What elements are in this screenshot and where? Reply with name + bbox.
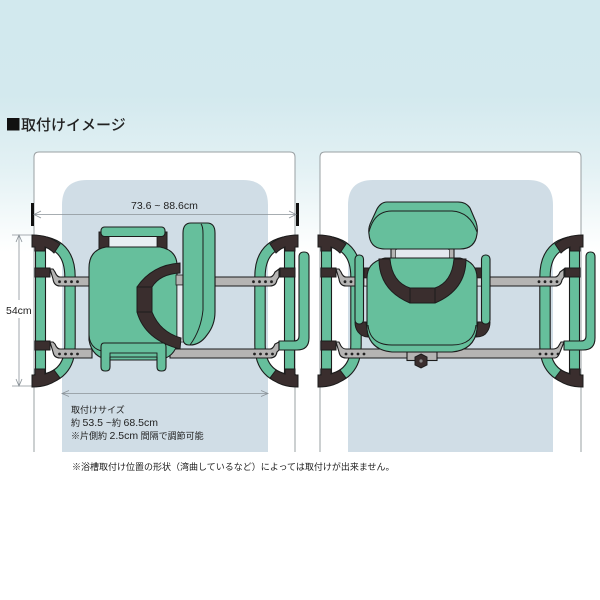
left clamp — [32, 235, 70, 387]
right armrest on rail — [564, 252, 595, 350]
left rails — [35, 268, 92, 358]
right clamp — [545, 235, 583, 387]
right clamp — [260, 235, 298, 387]
arm shadows — [364, 268, 482, 286]
seat body — [89, 247, 177, 360]
panel: right bathtub top view — [318, 152, 595, 452]
mounting size text: 約 53.5 ~約 68.5cm — [71, 417, 158, 429]
width dimension 73.6-88.6cm — [31, 200, 299, 226]
height dimension 54cm: 54cm — [6, 305, 32, 317]
left armrest — [355, 255, 368, 337]
seat front view — [355, 202, 490, 368]
right armrest on rail — [279, 252, 309, 350]
footnote: ※浴槽取付け位置の形状（湾曲しているなど）によっては取付けが出来ません。 — [72, 461, 395, 472]
panel: left bathtub top view — [6, 152, 309, 452]
seat body — [367, 258, 477, 352]
tub interior — [62, 180, 268, 452]
backrest — [183, 223, 215, 345]
rail behind backrest — [176, 275, 184, 342]
mounting size text — [71, 404, 204, 442]
seat side view — [89, 223, 215, 371]
mounting size text: 取付けサイズ — [71, 404, 125, 415]
mounting size dimension — [62, 390, 268, 396]
center bracket and nut — [407, 352, 437, 368]
rails — [321, 268, 580, 358]
back posts — [391, 248, 454, 260]
C-shaped armrest — [137, 263, 181, 349]
mounting size text: ※片側約 2.5cm 間隔で調節可能 — [71, 430, 204, 442]
tub interior — [348, 180, 553, 452]
backrest — [369, 202, 477, 249]
top handle — [99, 227, 167, 250]
left clamp — [318, 235, 356, 387]
width dimension 73.6-88.6cm: 73.6 ~ 88.6cm — [131, 200, 198, 212]
U-shaped armrest — [379, 259, 466, 303]
title: 取付けイメージ — [21, 117, 126, 134]
right rails — [170, 268, 295, 358]
right armrest — [476, 255, 490, 337]
bottom handle — [101, 343, 166, 371]
height dimension 54cm — [6, 235, 32, 386]
